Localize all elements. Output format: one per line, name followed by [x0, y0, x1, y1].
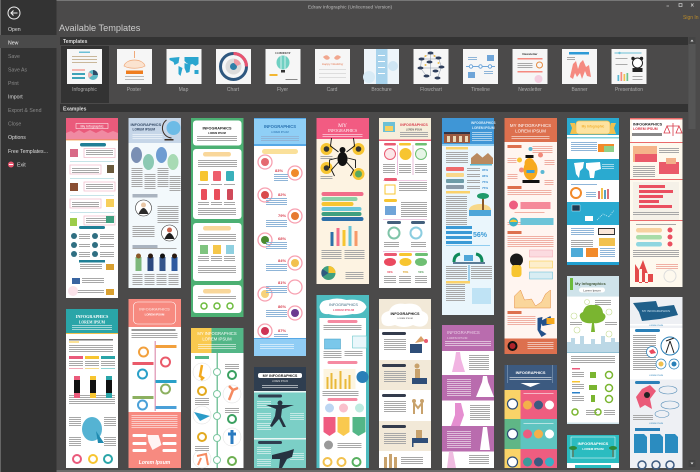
example card 3 — [191, 118, 244, 317]
sidebar menu: Export & Send — [8, 108, 42, 114]
example card 7: INFOGRAPHICS — [471, 121, 495, 125]
example card 8 — [504, 118, 557, 354]
sidebar menu: Close — [8, 122, 21, 128]
template labels: Chart — [227, 87, 240, 93]
example card 2: INFOGRAPHICS — [130, 122, 162, 127]
example card 2b: INFOGRAPHICS — [139, 306, 170, 312]
example card 5: MY — [338, 123, 347, 129]
example card 6: 50% — [418, 270, 424, 274]
example card 5 — [316, 118, 369, 284]
thumb: flyer — [266, 49, 300, 84]
example card 8b: INFOGRAPHICS — [516, 370, 546, 375]
example card 9 — [567, 118, 619, 265]
example card 1b — [66, 309, 118, 468]
example card 4: 68% — [278, 236, 286, 241]
example card 5b — [316, 295, 369, 468]
sidebar menu: Exit — [17, 162, 26, 168]
example card 4: 84% — [278, 258, 286, 263]
example card 9b — [567, 276, 619, 424]
example card 4b — [254, 367, 306, 468]
template labels: Flowchart — [420, 87, 442, 93]
example card 3: INFOGRAPHICS — [202, 126, 232, 130]
example card 6: INFOGRAPHICS — [400, 123, 428, 127]
example card 10: INFOGRAPHICS — [633, 122, 663, 126]
example card 7: 56% — [473, 232, 488, 239]
template labels: Infographic — [72, 87, 97, 93]
thumb: newsletter: Newsletter — [522, 52, 538, 56]
thumb: newsletter — [512, 49, 548, 84]
example card 6: LOREM IPSUM — [406, 130, 422, 132]
template labels: Presentation — [615, 87, 643, 93]
template labels: Timeline — [471, 87, 490, 93]
template labels — [72, 87, 643, 93]
section bar: templates — [60, 37, 688, 45]
example card 10b: MY INFOGRAPHICS — [642, 309, 670, 313]
sidebar menu: New — [8, 40, 19, 46]
thumb: timeline — [463, 49, 498, 84]
example card 10: LOREM IPSUM — [633, 127, 658, 131]
example card 10b — [630, 297, 682, 469]
template labels: Poster — [127, 87, 142, 93]
example card 6 — [379, 118, 431, 288]
sign in link: Sign In — [683, 15, 699, 21]
example card 9: My Infographic — [582, 124, 605, 128]
sidebar menu: Free Templates... — [8, 149, 48, 155]
example card 1b: INFOGRAPHICS — [76, 314, 109, 319]
example card 7b: LOREM IPSUM — [447, 336, 468, 340]
template labels: Flyer — [277, 87, 288, 93]
thumb: banner — [562, 49, 597, 84]
example card 9b: My Infographics — [575, 281, 606, 286]
window controls — [666, 4, 694, 6]
example card 4: 87% — [278, 328, 286, 333]
thumb: flowchart — [414, 49, 448, 84]
example card 4: LOREM IPSUM — [271, 131, 289, 134]
example card 1b: LOREM IPSUM — [79, 320, 106, 324]
sidebar menu: Options — [8, 135, 26, 141]
example card 2b: LOREM IPSUM — [145, 312, 165, 316]
example card 4: 79% — [278, 213, 286, 218]
example card 3b: LOREM IPSUM — [202, 336, 232, 342]
sidebar menu: Save — [8, 54, 20, 60]
sidebar menu: Print — [8, 81, 19, 87]
example card 2b: Lorem Ipsum — [139, 460, 171, 466]
example card 9b: Lorem Ipsum — [583, 288, 601, 292]
example card 6b: LOREM IPSUM — [397, 318, 413, 320]
template labels: Brochure — [371, 87, 392, 93]
example card 2 — [128, 118, 181, 288]
thumb: infographic — [67, 49, 102, 84]
example card 5b: LOREM IPSUM — [333, 308, 355, 312]
example card 2: LOREM IPSUM — [132, 128, 155, 132]
example card 7b — [442, 325, 494, 468]
sidebar menu: Save As — [8, 68, 27, 74]
example card 6b — [379, 299, 431, 468]
sidebar menu: Import — [8, 94, 23, 100]
example card 9c: LOREM IPSUM — [582, 447, 604, 451]
example card 1 — [66, 118, 118, 298]
example card 9c — [567, 435, 619, 468]
title bar text: Edraw Infographic (Unlicensed Version) — [308, 4, 393, 10]
example card 4: 82% — [278, 192, 286, 197]
example card 8: LOREM IPSUM — [515, 128, 546, 134]
example card 4 — [254, 118, 306, 356]
example card 7: LOREM IPSUM — [472, 126, 495, 130]
example card 4: 86% — [278, 304, 286, 309]
sidebar menu: Open — [8, 27, 21, 33]
template labels: Banner — [571, 87, 588, 93]
example card 3b — [191, 328, 244, 468]
thumb: chart — [216, 49, 251, 84]
example card 4b: MY INFOGRAPHICS — [263, 374, 298, 378]
template labels: Map — [179, 87, 189, 93]
example card 7: 96% — [482, 174, 488, 178]
template labels: Newsletter — [518, 87, 542, 93]
sidebar menu — [0, 0, 56, 472]
template thumbnails — [67, 49, 646, 84]
thumb: card: Happy Wedding — [322, 62, 343, 66]
section bar: templates: Templates — [63, 39, 88, 45]
example card 4: INFOGRAPHICS — [264, 124, 296, 129]
example card 5b: INFOGRAPHICS — [329, 303, 358, 307]
example card 4: 83% — [275, 168, 283, 173]
example card 4b: LOREM IPSUM — [272, 381, 288, 383]
section bar: examples — [60, 104, 688, 112]
thumb: card — [315, 49, 350, 84]
example card 10b: LOREM IPSUM — [649, 423, 663, 425]
thumb: map — [166, 49, 202, 84]
example card 5: INFOGRAPHICS — [328, 128, 357, 133]
heading: available templates: Available Templates — [59, 23, 141, 33]
example card 6: 70% — [403, 270, 409, 274]
example card 9c: INFOGRAPHICS — [578, 441, 609, 446]
example card 8: MY INFOGRAPHICS — [510, 123, 551, 128]
example card 7 — [442, 118, 495, 315]
thumb: flyer: COMPANY — [275, 51, 292, 55]
thumb: brochure — [363, 49, 399, 84]
scrollbar — [688, 37, 696, 467]
example card 7: 75% — [482, 180, 488, 184]
template labels: Card — [327, 87, 338, 93]
example card 3b: MY INFOGRAPHICS — [197, 331, 237, 336]
example card 8b — [504, 365, 557, 468]
example card 6b: INFOGRAPHICS — [390, 312, 420, 316]
example card 10b: LOREM IPSUM — [649, 325, 663, 327]
example card 4: 81% — [278, 280, 286, 285]
section bar: examples: Examples — [63, 106, 87, 112]
example card 7: 95% — [482, 168, 488, 172]
example card 3: LOREM IPSUM — [208, 132, 226, 135]
example card 10 — [630, 118, 682, 287]
thumb: poster — [117, 49, 152, 84]
example card 1: My Infographic — [81, 124, 104, 128]
example card 7: 75% — [482, 186, 488, 190]
example card 6: 60% — [387, 270, 393, 274]
example card 7b: INFOGRAPHICS — [447, 330, 480, 335]
thumb: presentation — [612, 49, 646, 84]
example card 10b: LOREM IPSUM — [649, 375, 663, 377]
selected template highlight — [61, 46, 109, 103]
example card 2b — [128, 299, 181, 468]
